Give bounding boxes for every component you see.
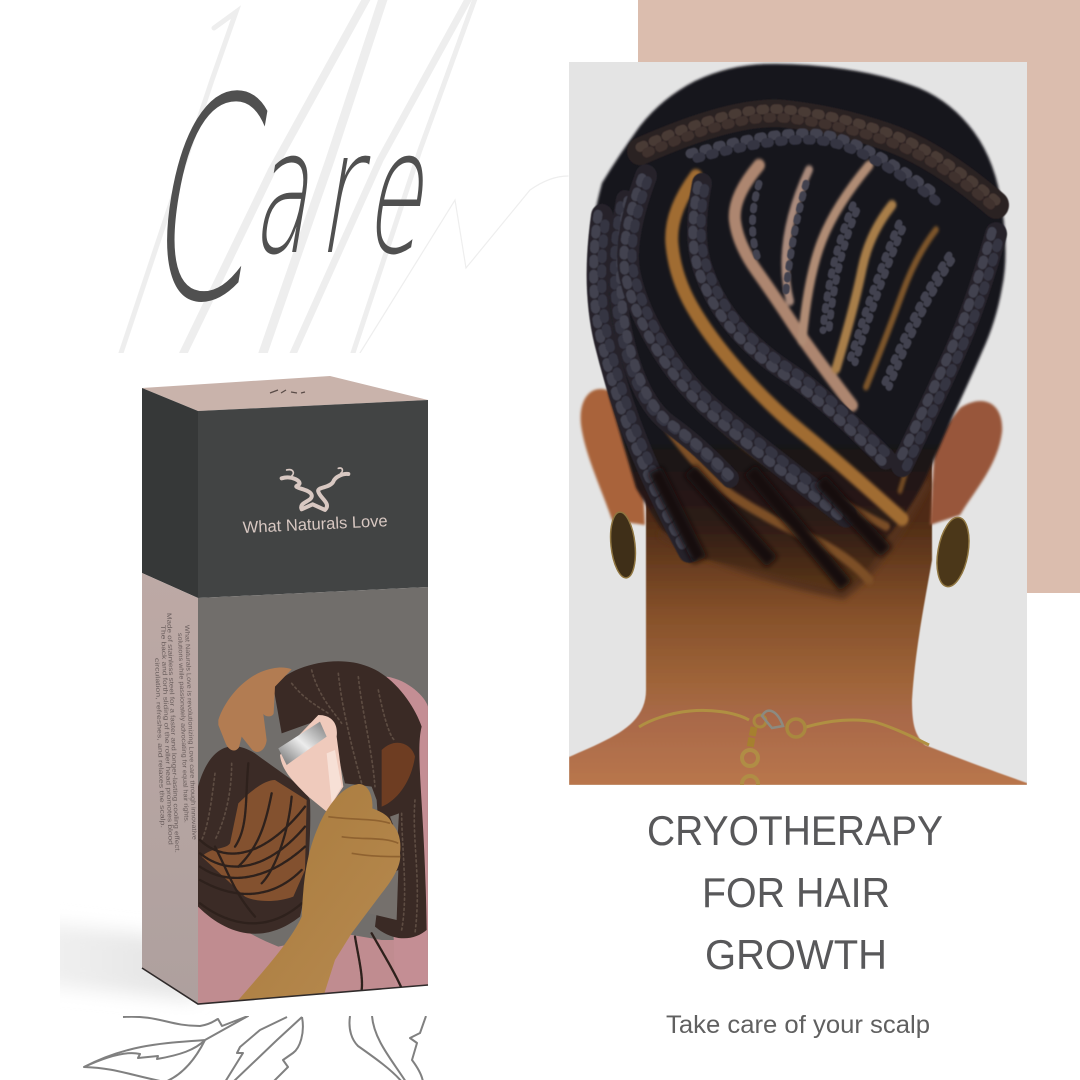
side panel text: What Naturals Love is revolutionizing Love care through innovative [183,625,198,840]
upper hand [218,668,292,752]
braids right [273,661,427,938]
braids left [198,746,310,934]
pink shirt [198,897,428,1004]
script title: Care [131,40,466,365]
photo: braided hair seen from behind [569,62,1027,792]
side panel text: circulation, refreshes, and relaxes the scalp. [153,658,166,828]
decorative leaf outlines [84,1016,426,1080]
right earring [936,516,970,588]
box lower left side [142,573,198,1004]
box photo: woman rolling scalp [198,661,428,1004]
box front gray panel [198,587,428,1004]
heading: Cryotherapy for Hair Growth: GROWTH [705,931,887,978]
brand logo mark [282,468,348,510]
braids [589,64,1006,592]
side panel text [153,613,198,853]
loose strands [200,807,305,854]
left ear [581,389,645,525]
nape strips [655,470,886,586]
heading: Cryotherapy for Hair Growth: CRYOTHERAPY [647,807,943,854]
leaf three [349,1016,426,1080]
lower hand and arm [238,784,400,1000]
roller handle [280,715,343,812]
heading: Cryotherapy for Hair Growth: FOR HAIR [702,869,890,916]
brand name: What Naturals Love [242,512,388,537]
small logo on top [270,390,305,393]
box top [142,376,428,411]
script title: Care: are [245,92,457,293]
box dark front [198,400,428,598]
tagline: Take care of your scalp [666,1011,930,1039]
soft nape fuzz [662,480,925,592]
right ear [930,401,1002,525]
product box [60,376,428,1005]
side panel text: The back and forth sliding of the roller head promotes blood [159,625,174,845]
floor shadow [60,925,190,1002]
pink accent block [638,0,1080,593]
leaf two [225,1017,303,1080]
leaf one [84,1016,248,1080]
left earring [610,512,636,579]
gray gap in braids [376,870,398,920]
side panel text: solutions while passionately advocating for equal hair rights. [176,633,190,823]
box bottom edge [142,968,428,1004]
box dark left side [142,388,198,598]
heading: Cryotherapy for Hair Growth [647,807,943,978]
script title: Care: C [131,40,287,365]
face and chest [202,780,307,901]
roller metal head [278,722,327,765]
background scribble strokes [120,0,568,356]
necklace [639,710,929,792]
side panel text: Made of stainless steel for a faster and longer-lasting cooling effect. [165,613,180,853]
hair texture [338,673,362,783]
neck and shoulders [569,460,1027,785]
